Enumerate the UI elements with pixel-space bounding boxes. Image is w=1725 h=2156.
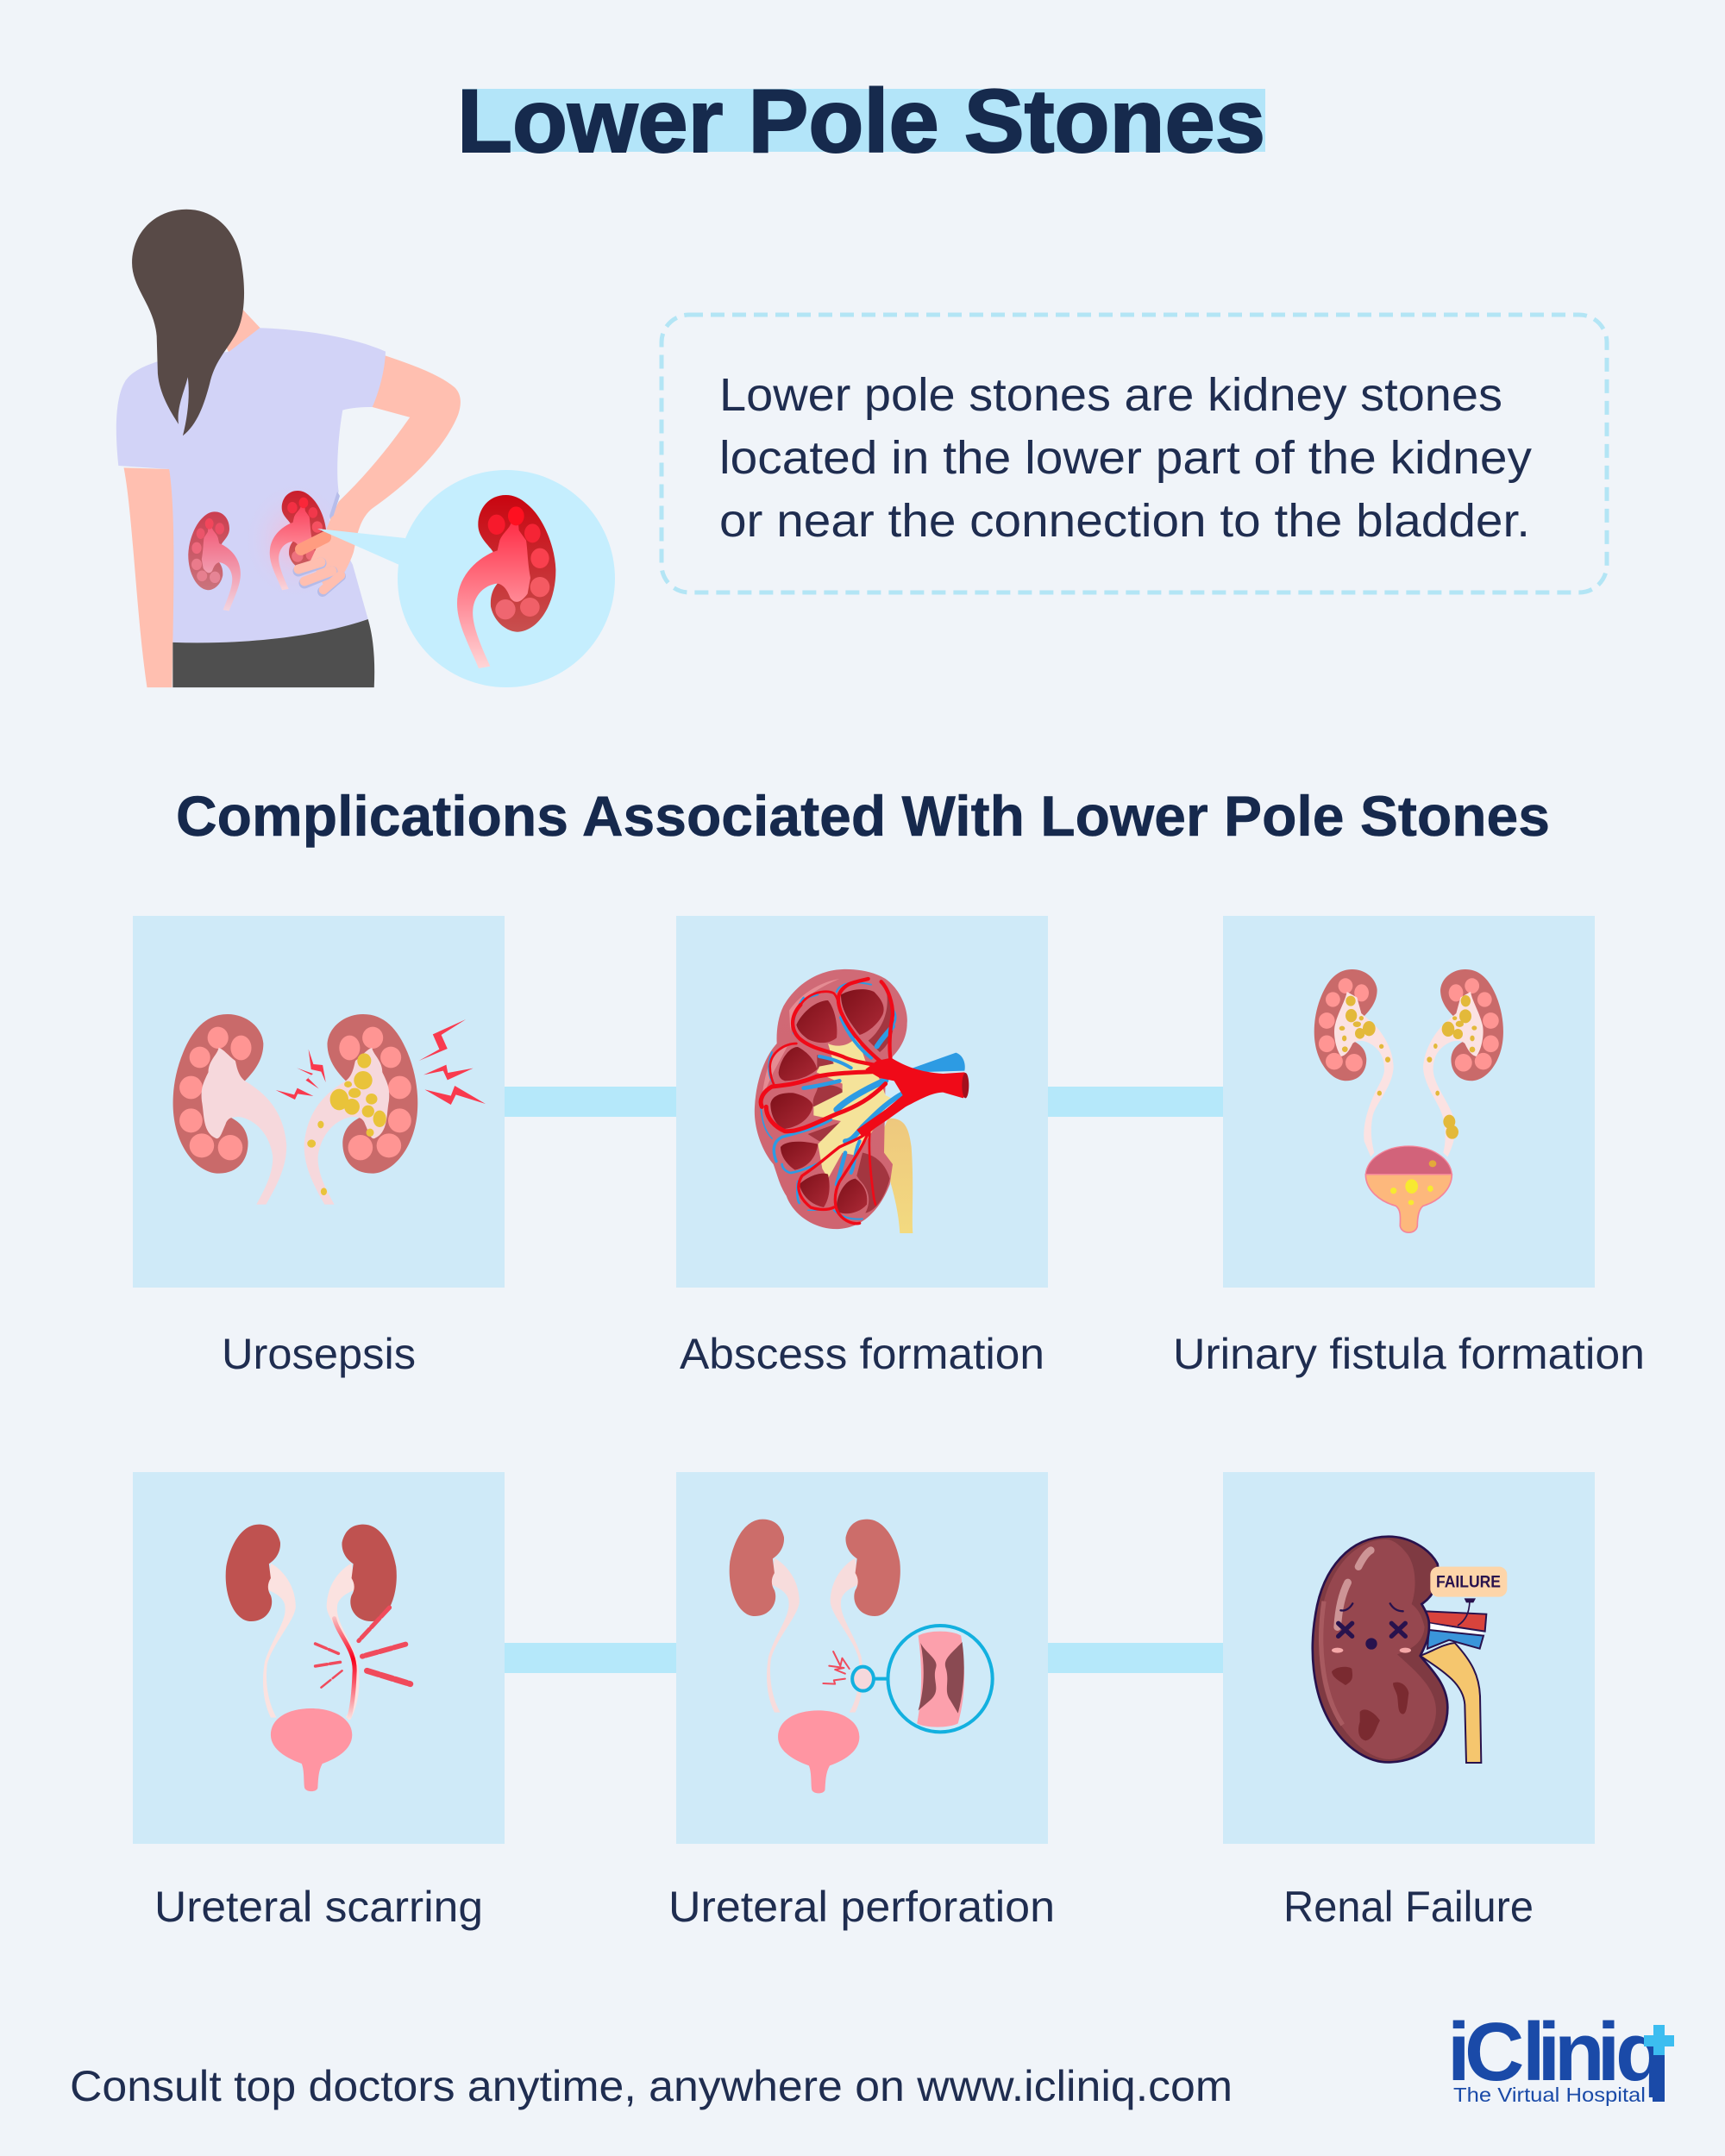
panel: ureteral scarring — [133, 1472, 505, 1931]
icon: kidney cross-section — [755, 969, 969, 1233]
panel: urinary fistula formation — [1173, 916, 1645, 1378]
icon: arm raised to back — [333, 355, 461, 548]
label: ureteral perforation: Ureteral perforation — [668, 1883, 1055, 1931]
connector row 1 right — [1048, 1087, 1223, 1117]
icon: urinary tract with scarred ureter — [226, 1525, 411, 1791]
icon: urinary tract with stones — [1314, 969, 1503, 1232]
title: Lower Pole Stones — [457, 72, 1265, 172]
panel: renal failure — [1223, 1472, 1595, 1931]
label: ureteral scarring: Ureteral scarring — [154, 1883, 483, 1931]
connector row 2 right — [1048, 1643, 1223, 1673]
definition callout: located in the lower part of the kidney — [719, 432, 1532, 484]
icon: urinary tract with magnified perforation — [730, 1520, 993, 1793]
definition callout: Lower pole stones are kidney stones — [719, 369, 1502, 421]
logo: iCliniq: iCliniq — [1447, 2006, 1666, 2098]
label: renal failure: Renal Failure — [1283, 1883, 1534, 1931]
icon: right kidney — [270, 491, 326, 590]
callout circle with zoomed kidney — [317, 470, 615, 687]
icon: pain glow — [242, 480, 349, 601]
connector row 2 left — [505, 1643, 676, 1673]
icon: hair — [132, 210, 244, 436]
icon: left kidney — [188, 511, 241, 611]
icon: kidneys with stones and pain bolts — [173, 1014, 486, 1205]
icon: neck — [218, 309, 261, 354]
icon: shirt — [116, 328, 386, 642]
connector row 1 left — [505, 1087, 676, 1117]
footer text: Consult top doctors anytime, anywhere on www.icliniq.com — [70, 2062, 1233, 2110]
panel: ureteral perforation — [668, 1472, 1055, 1931]
icon: left arm — [124, 467, 173, 687]
icon: hand — [298, 492, 361, 593]
panel: abscess formation — [676, 916, 1048, 1378]
definition callout: or near the connection to the bladder. — [719, 495, 1530, 547]
logo: iCliniq: The Virtual Hospital — [1453, 2084, 1646, 2106]
section heading: Complications Associated With Lower Pole Stones — [176, 784, 1550, 848]
icon: trousers — [172, 619, 374, 687]
definition callout — [662, 315, 1607, 592]
illustration: woman with kidney pain — [116, 210, 615, 687]
icon: sad failing kidney: FAILURE — [1436, 1574, 1501, 1592]
icon: sad failing kidney — [1313, 1537, 1507, 1763]
label: urosepsis: Urosepsis — [222, 1330, 416, 1378]
body of the woman — [116, 210, 461, 687]
panel: urosepsis — [133, 916, 505, 1378]
label: urinary fistula formation: Urinary fistula formation — [1173, 1330, 1645, 1378]
label: abscess formation: Abscess formation — [680, 1330, 1044, 1378]
